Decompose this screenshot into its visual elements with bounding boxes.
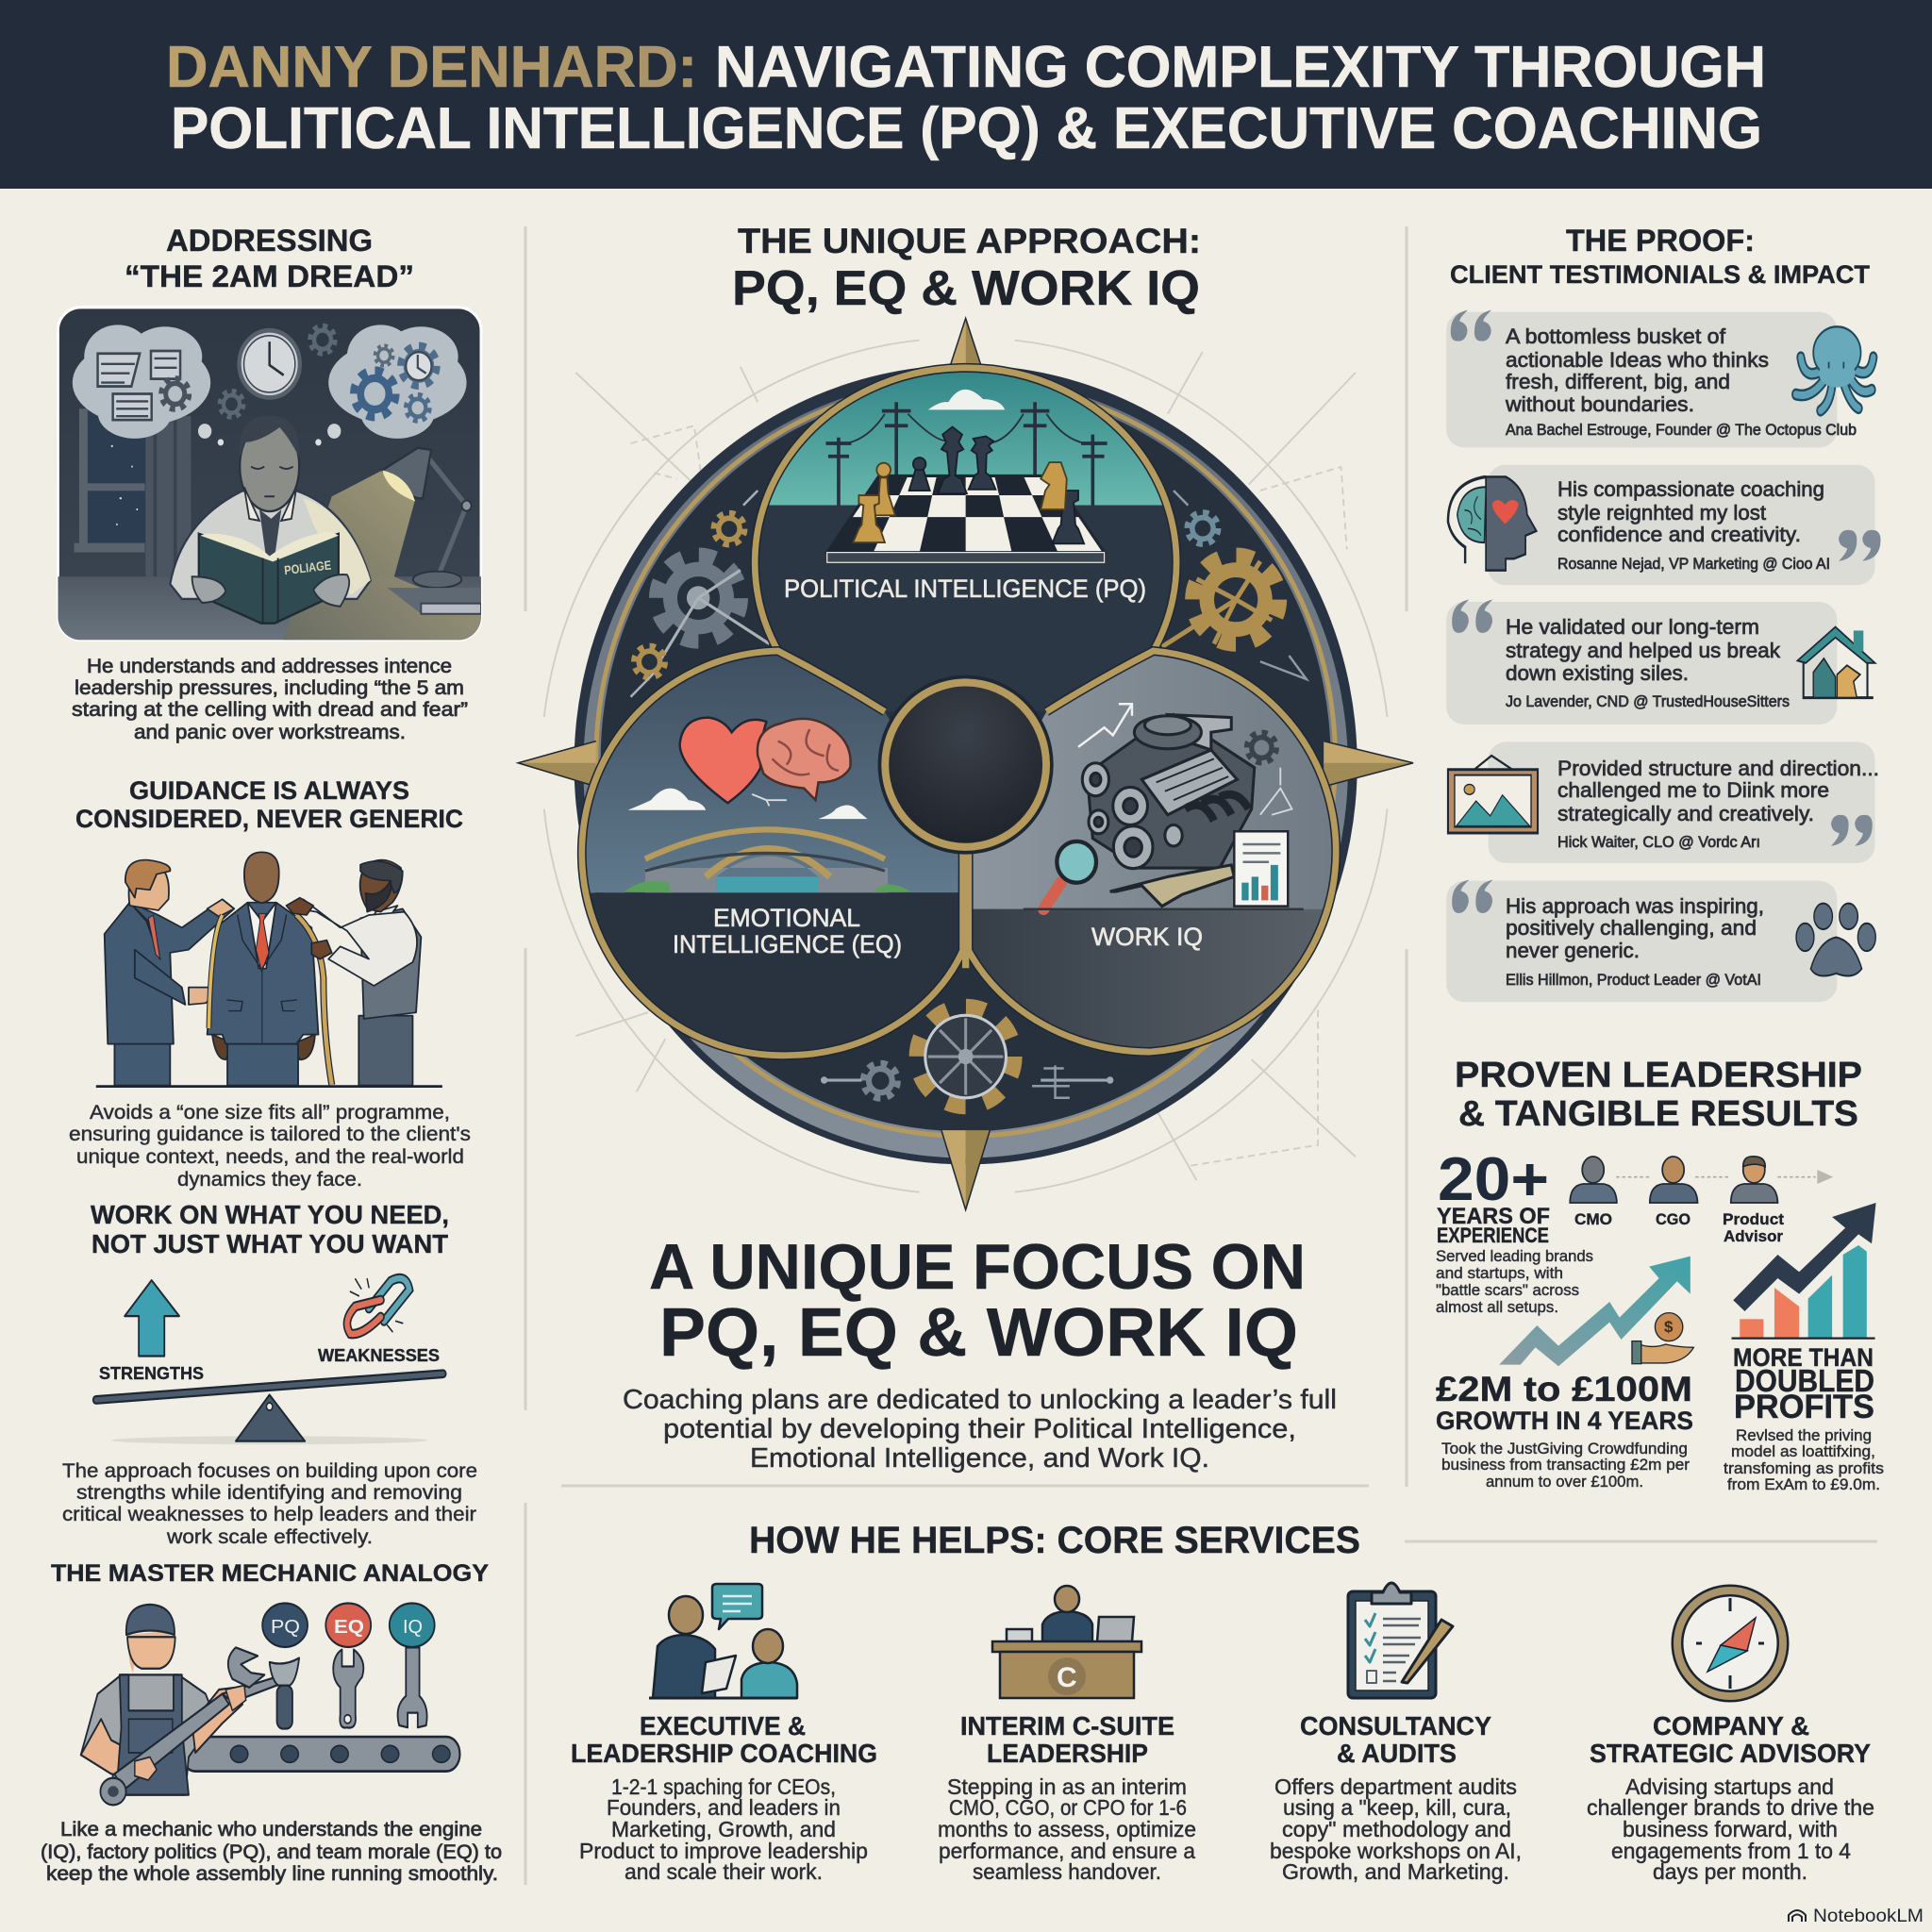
testimonial 3: down existing siles.: [1506, 661, 1689, 685]
badge labels: EQ: [334, 1617, 364, 1638]
icon: engine: [1082, 715, 1255, 907]
description: 2am dread: leadership pressures, including “the 5 am: [75, 677, 464, 699]
testimonial 5: [1506, 894, 1764, 989]
description: guidance: ensuring guidance is tailored to the client's: [69, 1124, 471, 1145]
heading: work on what you need: NOT JUST WHAT YOU WANT: [92, 1229, 448, 1258]
stat: revenue growth: annum to over £100m.: [1486, 1473, 1643, 1491]
heading: core services: HOW HE HELPS: CORE SERVICES: [749, 1520, 1360, 1561]
label: weaknesses: WEAKNESSES: [318, 1346, 440, 1365]
measuring tape: [208, 915, 332, 1085]
service descriptions: challenger brands to drive the: [1587, 1795, 1874, 1820]
heading: 2am dread: “THE 2AM DREAD”: [125, 259, 414, 293]
icon: octopus: [1796, 326, 1874, 410]
description: mechanic: Like a mechanic who understands the engine: [60, 1819, 482, 1840]
description: guidance: Avoids a “one size fits all” programme,: [90, 1102, 450, 1124]
heading: work on what you need: [91, 1200, 449, 1258]
service descriptions: performance, and ensure a: [939, 1839, 1195, 1863]
service: executive coaching: [649, 1584, 797, 1698]
service descriptions: 1-2-1 spaching for CEOs,: [611, 1774, 836, 1799]
badge: PQ: [262, 1604, 308, 1647]
icon: coin and hand: [1632, 1313, 1693, 1364]
label: emotional intelligence: INTELLIGENCE (EQ): [673, 930, 902, 958]
description: guidance: dynamics they face.: [177, 1169, 362, 1191]
outer ring: [575, 365, 1357, 1164]
testimonial 5: His approach was inspiring,: [1506, 894, 1764, 918]
desk lamp: [428, 458, 467, 576]
stat: doubled profits: [1724, 1343, 1884, 1493]
panel: master mechanic analogy: [41, 1560, 502, 1885]
thought cloud left: [73, 325, 210, 439]
service descriptions: Advising startups and: [1625, 1774, 1834, 1799]
panel: guidance never generic: [69, 776, 471, 1191]
illustration: tailors measuring a suit: [96, 852, 442, 1087]
stat: revenue growth: [1436, 1370, 1693, 1491]
service descriptions: and scale their work.: [625, 1859, 823, 1884]
labels: career roles: [1574, 1210, 1784, 1245]
testimonial 3: strategy and helped us break: [1506, 639, 1781, 662]
service descriptions: seamless handover.: [973, 1859, 1161, 1884]
badge labels: IQ: [403, 1617, 423, 1638]
labels: career roles: Product: [1723, 1210, 1784, 1228]
panel: core services: [571, 1520, 1874, 1884]
illustration: mechanic with wrenches and conveyor: [81, 1604, 459, 1805]
heading: the proof: THE PROOF:: [1566, 224, 1755, 258]
icon: report: [1234, 831, 1288, 907]
heading: guidance: GUIDANCE IS ALWAYS: [129, 776, 409, 805]
service titles: INTERIM C-SUITE: [960, 1711, 1174, 1740]
service descriptions: Offers department audits: [1274, 1774, 1517, 1799]
icon: compass: [1677, 1591, 1783, 1696]
testimonial 4: Provided structure and direction...: [1557, 757, 1879, 780]
career path people: [1570, 1157, 1777, 1203]
service: interim c-suite: C: [1057, 1662, 1077, 1693]
stat: revenue growth: business from transacting £2m per: [1441, 1456, 1690, 1474]
stat: doubled profits: model as loattifxing,: [1731, 1442, 1875, 1460]
quote marks: [1451, 310, 1880, 913]
testimonial 5: never generic.: [1506, 939, 1640, 962]
stat: doubled profits: DOUBLED: [1735, 1363, 1874, 1398]
heading: the proof: CLIENT TESTIMONIALS & IMPACT: [1450, 260, 1871, 289]
stat: 20+ years of experience: 20+: [1438, 1144, 1549, 1213]
description: strengths and weaknesses: [62, 1460, 477, 1548]
panel: proven leadership and results: [1436, 1056, 1884, 1493]
service titles: CONSULTANCY: [1300, 1711, 1491, 1740]
label: strengths: STRENGTHS: [99, 1364, 204, 1383]
main title: DANNY DENHARD:: [166, 35, 697, 100]
illustrations: career icons and growth arrows: [1499, 1157, 1876, 1366]
badge labels: PQ: [271, 1617, 300, 1638]
service: interim c-suite: [992, 1586, 1141, 1698]
panel: work on what you need: [62, 1200, 477, 1548]
description: mechanic: keep the whole assembly line running smoothly.: [46, 1863, 498, 1885]
open book: [199, 534, 339, 624]
tool: PQ mallet: [270, 1647, 427, 1729]
testimonial 2: His compassionate coaching: [1557, 477, 1824, 501]
tool: EQ wrench: [333, 1650, 363, 1727]
service descriptions: months to assess, optimize: [938, 1817, 1196, 1841]
header banner: [0, 0, 1932, 189]
clouds and birds: [628, 789, 868, 819]
description: 2am dread: and panic over workstreams.: [134, 722, 406, 743]
teal growth arrow: [1499, 1257, 1690, 1366]
power poles: [825, 402, 1108, 506]
thought cloud right: [328, 325, 467, 439]
coin symbol: $: [1664, 1318, 1674, 1336]
service descriptions: Growth, and Marketing.: [1282, 1859, 1509, 1884]
icon: chart arrow: [1078, 704, 1132, 747]
conveyor belt: [182, 1737, 459, 1772]
illustration: seesaw of strengths and weaknesses: [96, 1278, 443, 1444]
stat: 20+ years of experience: [1436, 1144, 1593, 1316]
stat: doubled profits: PROFITS: [1734, 1389, 1874, 1425]
testimonial 4: challenged me to Diink more: [1557, 778, 1829, 802]
testimonial 2: Rosanne Nejad, VP Marketing @ Cioo AI: [1557, 556, 1830, 573]
heading: proven leadership: & TANGIBLE RESULTS: [1458, 1094, 1858, 1134]
labels: career roles: CMO: [1574, 1210, 1612, 1228]
description: guidance: [69, 1102, 471, 1191]
cloud: [928, 390, 1005, 409]
icon: magnifying glass: [1043, 883, 1061, 909]
stat: 20+ years of experience: YEARS OF: [1437, 1204, 1550, 1229]
description: strengths and weaknesses: strengths while identifying and removing: [76, 1482, 462, 1504]
bar chart: [1740, 1245, 1867, 1338]
stat: doubled profits: from ExAm to £9.0m.: [1727, 1475, 1880, 1493]
wall clock: [240, 330, 300, 397]
lobe: work iq: [966, 647, 1358, 1062]
description: mechanic: (IQ), factory politics (PQ), and team morale (EQ) to: [41, 1841, 502, 1863]
description: strengths and weaknesses: critical weaknesses to help leaders and their: [62, 1504, 476, 1525]
badge: EQ: [325, 1604, 371, 1647]
testimonial 4: Hick Waiter, CLO @ Vordc Arı: [1557, 834, 1760, 851]
service: consultancy and audits: [1348, 1583, 1453, 1698]
heading: master mechanic: THE MASTER MECHANIC ANALOGY: [51, 1560, 489, 1587]
service descriptions: bespoke workshops on AI,: [1270, 1839, 1522, 1863]
chart: central three-lobed intelligence diagram: [518, 319, 1413, 1209]
compass points: [518, 319, 1413, 1209]
panel: addressing the 2am dread: [58, 224, 481, 743]
testimonial 3: Jo Lavender, CND @ TrustedHouseSitters: [1506, 693, 1790, 710]
stat: doubled profits: Revlsed the priving: [1736, 1426, 1872, 1444]
man's shirt: [170, 491, 371, 599]
description: 2am dread: staring at the celling with dread and fear”: [72, 699, 468, 721]
service titles: & AUDITS: [1337, 1739, 1457, 1768]
icon: brain: [758, 719, 851, 800]
badge: IQ: [390, 1604, 435, 1647]
wrench in hand: [100, 1647, 293, 1805]
service descriptions: Founders, and leaders in: [607, 1795, 841, 1820]
description: 2am dread: He understands and addresses intence: [87, 656, 452, 677]
icon: executive at desk: [992, 1586, 1141, 1698]
heading: the unique approach: THE UNIQUE APPROACH:: [738, 222, 1201, 260]
testimonial 5: Ellis Hillmon, Product Leader @ VotAI: [1506, 972, 1761, 989]
heading: the unique approach: PQ, EQ & WORK IQ: [732, 261, 1200, 316]
label: political intelligence: POLITICAL INTELLIGENCE (PQ): [784, 575, 1146, 603]
heading: 2am dread: ADDRESSING: [166, 224, 373, 258]
testimonial 2: [1557, 477, 1830, 573]
stat: doubled profits: MORE THAN: [1733, 1343, 1874, 1372]
testimonial cards and icons: [1446, 310, 1880, 1002]
main title: NAVIGATING COMPLEXITY THROUGH: [715, 35, 1766, 100]
service descriptions: CMO, CGO, or CPO for 1-6: [949, 1795, 1187, 1820]
testimonial 4: strategically and creatively.: [1557, 802, 1814, 825]
heading: guidance: CONSIDERED, NEVER GENERIC: [75, 805, 463, 833]
service descriptions: engagements from 1 to 4: [1611, 1839, 1851, 1863]
labels: career roles: Advisor: [1724, 1227, 1783, 1245]
main title: POLITICAL INTELLIGENCE (PQ) & EXECUTIVE COACHING: [171, 96, 1762, 161]
service titles: EXECUTIVE &: [640, 1711, 806, 1740]
icon: head with brain and heart: [1448, 476, 1537, 571]
heading: a unique focus: [649, 1231, 1306, 1371]
heading: work on what you need: WORK ON WHAT YOU NEED,: [91, 1200, 449, 1229]
description: strengths and weaknesses: The approach focuses on building upon core: [62, 1460, 477, 1482]
testimonial 1: fresh, different, big, and: [1506, 370, 1730, 393]
stat: 20+ years of experience: "battle scars" across: [1436, 1281, 1579, 1299]
label: emotional intelligence: [673, 904, 902, 958]
illustration: man reading at night: [58, 308, 481, 640]
stat: doubled profits: transfoming as profits: [1724, 1459, 1884, 1477]
description: 2am dread: [72, 656, 468, 743]
man's face: [240, 422, 299, 511]
heading: a unique focus: PQ, EQ & WORK IQ: [659, 1295, 1298, 1371]
description: unique focus: Emotional Intelligence, and Work IQ.: [750, 1443, 1209, 1474]
description: unique focus: Coaching plans are dedicated to unlocking a leader’s full: [623, 1385, 1337, 1415]
panel: testimonials: [1446, 224, 1880, 1002]
stat: 20+ years of experience: almost all setups.: [1436, 1298, 1558, 1316]
description: unique focus: potential by developing their Political Intelligence,: [663, 1414, 1296, 1444]
testimonial 1: [1505, 325, 1857, 439]
service descriptions: Stepping in as an interim: [947, 1774, 1187, 1799]
testimonial 3: [1506, 615, 1790, 710]
chess board: [827, 475, 1105, 553]
service titles: STRATEGIC ADVISORY: [1590, 1739, 1871, 1768]
service titles: COMPANY &: [1653, 1711, 1809, 1740]
stat: 20+ years of experience: EXPERIENCE: [1437, 1224, 1549, 1247]
stat: revenue growth: Took the JustGiving Crowdfunding: [1441, 1440, 1688, 1457]
icon: paw print: [1796, 904, 1875, 976]
heading: the proof: [1450, 224, 1871, 289]
service descriptions: business forward, with: [1623, 1817, 1838, 1841]
icon: framed picture: [1448, 756, 1538, 833]
service titles: LEADERSHIP: [987, 1739, 1148, 1768]
service descriptions: [579, 1774, 1874, 1884]
testimonial 1: actionable Ideas who thinks: [1506, 348, 1769, 372]
stat: revenue growth: £2M to £100M: [1436, 1370, 1692, 1408]
stone bridge: [645, 857, 888, 892]
hands on wrench: [135, 1686, 246, 1780]
service descriptions: Marketing, Growth, and: [611, 1817, 836, 1841]
right tailor: [287, 860, 421, 1086]
centre hub: [878, 675, 1054, 855]
stat: 20+ years of experience: and startups, with: [1436, 1264, 1563, 1282]
testimonial 1: without boundaries.: [1505, 392, 1694, 416]
service descriptions: copy" methodology and: [1282, 1817, 1511, 1841]
heading: guidance: [75, 776, 463, 833]
icon: heart: [680, 718, 766, 803]
tool: IQ wrench: [398, 1647, 427, 1727]
testimonial 4: [1557, 757, 1879, 851]
service descriptions: using a "keep, kill, cura,: [1283, 1795, 1511, 1820]
bottom gear: [918, 1008, 1013, 1105]
service titles: [571, 1711, 1871, 1768]
labels: career roles: CGO: [1656, 1210, 1690, 1228]
testimonial 2: confidence and creativity.: [1557, 523, 1801, 546]
mechanic figure: [81, 1605, 242, 1795]
faint blueprint lines: [544, 341, 1388, 1192]
heading: 2am dread: [125, 224, 414, 293]
heading: a unique focus: A UNIQUE FOCUS ON: [649, 1231, 1306, 1303]
illustration: man reading at night: POLIAGE: [284, 558, 332, 577]
heading: the unique approach: [732, 222, 1201, 316]
testimonial 1: Ana Bachel Estrouge, Founder @ The Octopus Club: [1506, 422, 1857, 439]
ground line: [96, 1083, 442, 1091]
heading: proven leadership: [1455, 1056, 1862, 1134]
testimonial 1: A bottomless busket of: [1506, 325, 1726, 348]
card backgrounds: [1446, 312, 1875, 1002]
column dividers: [525, 226, 1877, 1885]
stat: 20+ years of experience: Served leading brands: [1436, 1247, 1593, 1265]
icon: coaching conversation: [649, 1584, 797, 1698]
main title: [166, 35, 1766, 161]
notebooklm watermark: NotebookLM: [1813, 1907, 1924, 1926]
label: work iq: WORK IQ: [1091, 923, 1203, 951]
description: strengths and weaknesses: work scale effectively.: [166, 1526, 373, 1548]
badge labels: [271, 1617, 423, 1638]
description: mechanic: [41, 1819, 502, 1885]
lobe: political intelligence: [752, 360, 1179, 724]
chess pieces: [909, 426, 1084, 543]
testimonial 2: style reignhted my lost: [1557, 501, 1766, 525]
lobe: emotional intelligence: [573, 647, 972, 1064]
description: guidance: unique context, needs, and the real-world: [76, 1146, 464, 1168]
icon: house with pets: [1797, 627, 1875, 698]
testimonial 3: He validated our long-term: [1506, 615, 1759, 639]
service descriptions: days per month.: [1653, 1859, 1807, 1884]
man's tie: [259, 509, 281, 558]
icon: up arrow: [125, 1280, 179, 1356]
icon: broken chain link: [347, 1278, 409, 1334]
icon: clipboard and pen: [1348, 1583, 1453, 1698]
testimonial 5: positively challenging, and: [1506, 916, 1757, 940]
left tailor: [105, 860, 234, 1086]
service descriptions: Product to improve leadership: [579, 1839, 868, 1863]
service titles: LEADERSHIP COACHING: [571, 1739, 877, 1768]
heading: proven leadership: PROVEN LEADERSHIP: [1455, 1056, 1862, 1095]
icon: dark section gears: [631, 491, 1307, 1105]
description: unique focus: [623, 1385, 1337, 1474]
service: company advisory: [1677, 1591, 1783, 1696]
client in suit: [208, 852, 318, 1086]
stat: revenue growth: GROWTH IN 4 YEARS: [1436, 1407, 1693, 1435]
label: emotional intelligence: EMOTIONAL: [713, 904, 860, 932]
navy profit arrow: [1733, 1203, 1876, 1311]
